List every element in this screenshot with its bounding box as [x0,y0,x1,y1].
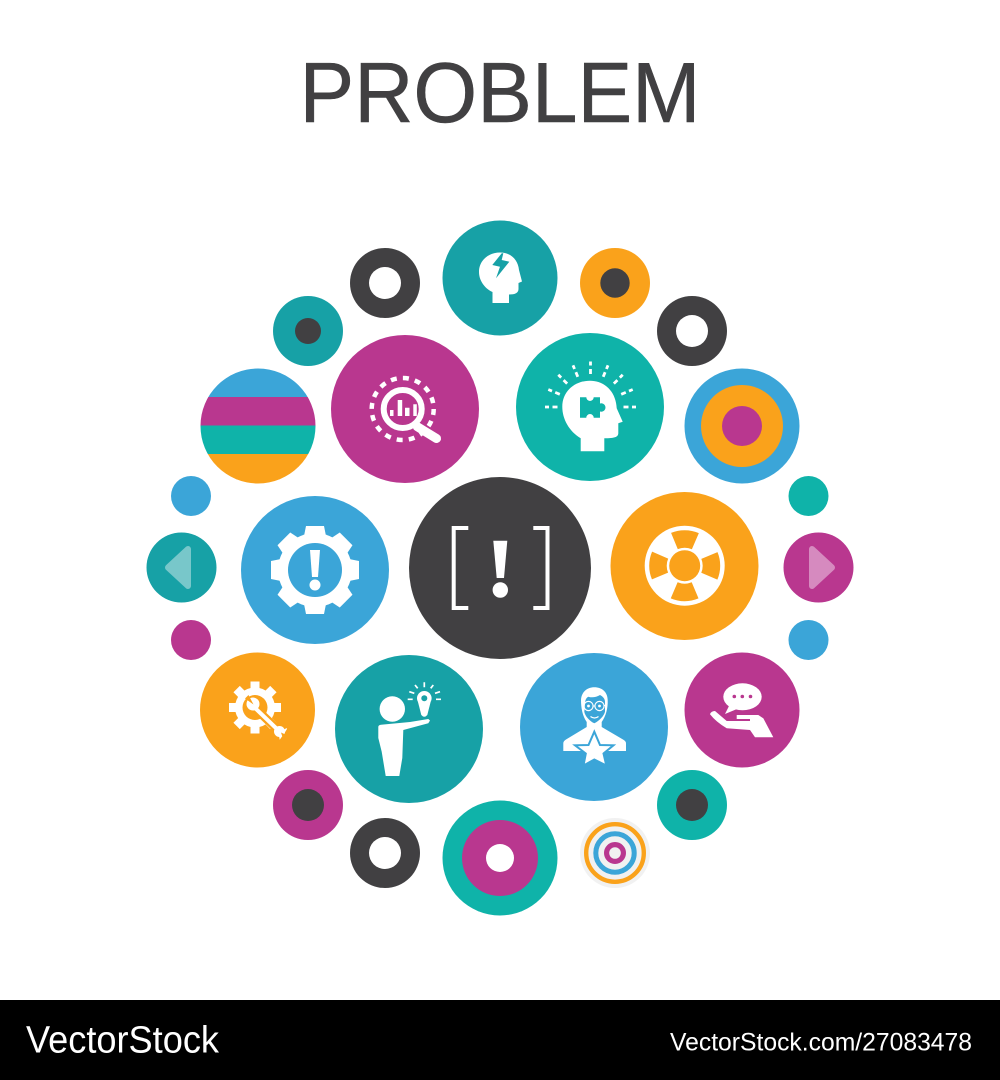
arrow: right [784,532,854,602]
dot: blue upper left [171,476,211,516]
icon: man with glasses and star [520,653,668,801]
footer bar: VectorStock [26,1020,220,1062]
ring: teal upper left [273,296,343,366]
center circle: exclamation in brackets [409,477,591,659]
icon: gear with wrench [200,652,315,768]
footer bar [0,1000,1000,1080]
dot: magenta lower left [171,620,211,660]
arrow: left [146,532,216,602]
icon: hand holding speech bubble [684,652,800,768]
ring: dark upper right [657,296,727,366]
ring: orange top right [580,248,650,318]
ring: magenta lower left [273,770,343,840]
title: PROBLEM [300,46,700,141]
icon: head with lightning bolt [442,220,558,336]
target rings [580,818,650,888]
concentric circle: blue orange magenta [684,368,800,484]
icon: head with puzzle piece and rays [516,333,664,481]
dot: teal upper right [788,476,828,516]
icon: person presenting light bulb [335,655,483,803]
ring: teal lower right [657,770,727,840]
icon: magnifier with bar chart [331,335,479,483]
ring: dark bottom left [350,818,420,888]
striped circle [200,368,316,484]
footer bar: VectorStock.com/27083478 [670,1028,972,1056]
icon: gear with exclamation [241,496,389,644]
icon: lifebuoy [610,492,758,640]
dot: blue lower right [788,620,828,660]
concentric circle: teal magenta white [442,800,558,916]
ring: dark top left [350,248,420,318]
